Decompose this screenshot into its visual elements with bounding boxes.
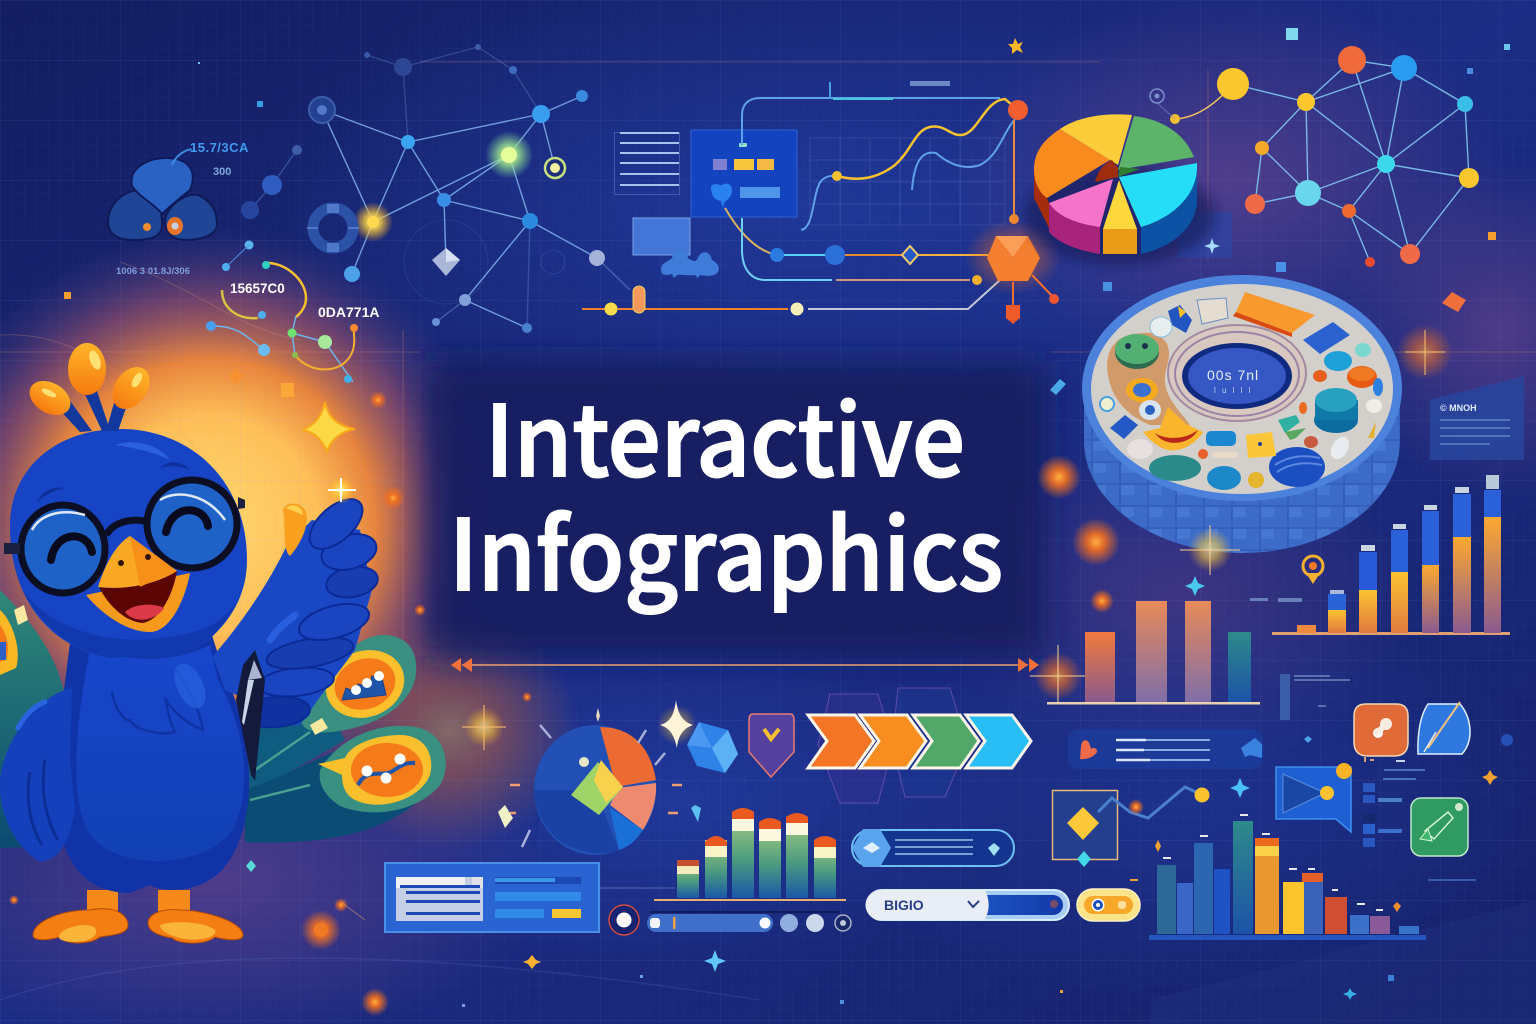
info card: right: © MNOH (1440, 403, 1477, 413)
icon: blue gem (687, 722, 738, 773)
app icon: green brush (1411, 798, 1468, 856)
label: data values (116, 140, 249, 277)
donut pie chart: lower centre (534, 725, 656, 855)
widgets on dial (1100, 292, 1383, 490)
3D dial with widgets (1082, 275, 1402, 553)
pen (236, 650, 265, 781)
step 2 (860, 715, 926, 768)
label: data values: 15.7/3CA (190, 140, 249, 155)
title: Interactive (485, 363, 965, 505)
step 3 (913, 715, 979, 768)
scattered sparkles and decor: bottom (462, 734, 1513, 1007)
arrow: double-headed divider (451, 658, 1039, 672)
peacock mascot (0, 343, 446, 943)
network diagram: top left (241, 44, 630, 333)
3D pie chart (1025, 114, 1215, 265)
small list blocks (1280, 674, 1425, 847)
sparkles near mascot (9, 368, 544, 1016)
step 1 (808, 715, 874, 768)
green bar chart (600, 808, 846, 901)
toggle dropdown (866, 890, 1069, 920)
label: data values: 300 (213, 166, 231, 178)
small card behind pie (1178, 212, 1232, 258)
toggle dropdown: BIGIO (884, 897, 924, 913)
label: data values: 1006 3 01.8J/306 (116, 266, 190, 277)
ring chart with value labels: 0DA771A (318, 304, 379, 320)
hexagon outlines behind chevrons (818, 688, 967, 803)
beak and smile (86, 536, 190, 632)
list row card (1068, 729, 1263, 769)
feet (33, 890, 243, 943)
chevron process (808, 715, 1031, 768)
blue square and cloud (633, 218, 719, 278)
slider control (647, 912, 851, 932)
icon: cloud data blob (108, 149, 217, 240)
list pill with hex icon (852, 829, 1014, 867)
ring chart with value labels (206, 240, 379, 383)
title (449, 363, 1003, 619)
central display: l u l l l (1214, 386, 1252, 395)
info card: right (1430, 376, 1524, 460)
text list card (614, 132, 680, 194)
glasses and eyes (4, 480, 245, 593)
crest (23, 343, 157, 432)
bar chart: lower right (1149, 815, 1426, 940)
head (10, 429, 247, 658)
icon: shield (749, 714, 794, 777)
bar chart: middle right (1047, 601, 1260, 704)
network diagram: top right (1150, 46, 1479, 267)
orange hexagon hub (965, 219, 1061, 324)
tail feathers (0, 590, 446, 848)
bar chart: upper right (1250, 475, 1510, 635)
central display: 00s 7nl (1207, 367, 1259, 383)
dial body (1082, 275, 1402, 553)
decor icons and sparkles: upper area (64, 28, 1510, 702)
left wing (0, 688, 75, 862)
grid panel (810, 138, 1005, 225)
diamond card with trend line (1052, 787, 1210, 867)
app icon: orange (1354, 704, 1408, 762)
flow nodes (604, 81, 1028, 316)
central display (1168, 325, 1306, 421)
connector lines (582, 82, 1018, 309)
chat panel icon (1276, 763, 1352, 832)
icon: donut ring (307, 204, 359, 252)
dashboard window panel (385, 863, 599, 932)
app icon: blue pen (1418, 702, 1470, 754)
step 4 (966, 715, 1031, 768)
raised wing with feathers (213, 490, 380, 730)
ring chart with value labels: 15657C0 (230, 281, 285, 296)
body (57, 625, 249, 893)
flow diagram: top centre (582, 81, 1061, 324)
blue dashboard card (691, 130, 797, 217)
title: Infographics (449, 477, 1003, 619)
title band (425, 362, 1045, 656)
radio button (609, 905, 639, 935)
yellow toggle (1077, 889, 1140, 921)
small decor shards around pie (498, 700, 701, 847)
